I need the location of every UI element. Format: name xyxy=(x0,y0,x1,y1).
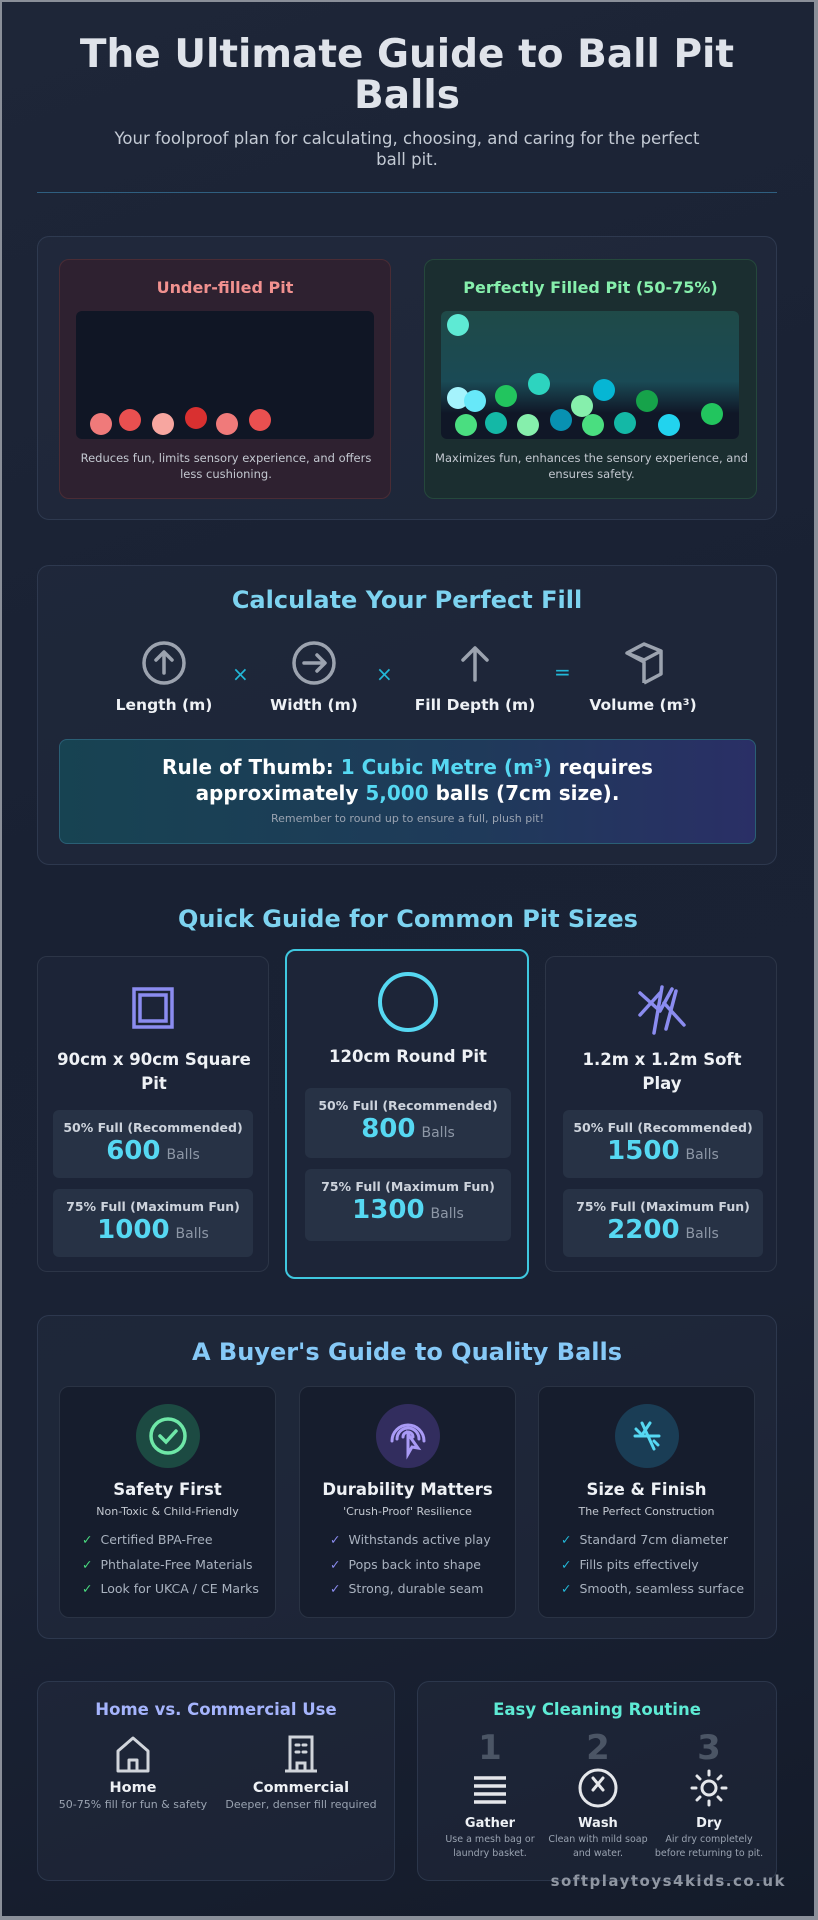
item: commercial xyxy=(225,1736,377,1811)
title: Safety First xyxy=(113,1480,222,1499)
step 2: wash: Wash xyxy=(578,1816,618,1831)
icon: check xyxy=(136,1404,200,1468)
card: size & finish xyxy=(538,1386,755,1618)
subtitle: Your foolproof plan for calculating, choosing, and caring for the perfect ball pit. xyxy=(115,129,699,169)
card title: 1.2m x 1.2m Soft Play xyxy=(582,1050,742,1093)
stat: 50%: 50% Full (Recommended) xyxy=(63,1120,243,1135)
callout: rule of thumb: Rule of Thumb: 1 Cubic Metre (m³) requires xyxy=(162,755,653,779)
checklist: ✓ Smooth, seamless surface xyxy=(561,1581,744,1596)
text: perfect description: Maximizes fun, enhances the sensory experience, and ensures safety. xyxy=(435,451,748,481)
panel: cleaning routine xyxy=(417,1681,777,1881)
formula labels: Fill Depth (m) xyxy=(415,696,535,714)
watermark: softplaytoys4kids.co.uk xyxy=(551,1872,786,1890)
icon: lines xyxy=(474,1776,506,1804)
stat: 75%: 75% Full (Maximum Fun) xyxy=(321,1179,495,1194)
icon: square xyxy=(132,987,174,1029)
stat: 75% xyxy=(563,1189,763,1257)
panel: buyer's guide xyxy=(37,1315,777,1639)
icon: building xyxy=(285,1736,317,1772)
stat: 50%: 50% Full (Recommended) xyxy=(573,1120,753,1135)
checklist: ✓ Fills pits effectively xyxy=(561,1556,699,1572)
step 3: dry: 3 xyxy=(697,1728,721,1768)
heading: calculate: Calculate Your Perfect Fill xyxy=(232,586,582,614)
icon: x circle xyxy=(578,1768,618,1808)
step 3: dry xyxy=(655,1728,763,1859)
panel: fill comparison xyxy=(37,236,777,520)
stat: 50% xyxy=(53,1110,253,1178)
checklist: ✓ Strong, durable seam xyxy=(330,1581,483,1596)
icon: length xyxy=(142,641,186,685)
checklist xyxy=(561,1532,744,1596)
item: commercial: Deeper, denser fill required xyxy=(225,1798,377,1811)
step 2: wash: 2 xyxy=(586,1728,610,1768)
pit illustration: full balls xyxy=(441,311,739,439)
checklist: ✓ Phthalate-Free Materials xyxy=(82,1556,252,1572)
icon: width xyxy=(292,641,336,685)
operator: times: × xyxy=(232,662,249,686)
icon: volume cube xyxy=(625,642,663,684)
heading: under-filled: Under-filled Pit xyxy=(157,278,293,297)
subtitle: 'Crush-Proof' Resilience xyxy=(343,1505,472,1518)
item: commercial: Commercial xyxy=(253,1780,349,1796)
step 1: gather: 1 xyxy=(478,1728,502,1768)
checklist: ✓ Look for UKCA / CE Marks xyxy=(82,1581,259,1596)
icon: sun xyxy=(690,1770,728,1806)
card: perfectly filled pit xyxy=(424,259,757,499)
stat: 50%: 800 Balls xyxy=(361,1114,455,1144)
formula labels: Width (m) xyxy=(270,696,358,714)
pit illustration: sparse balls xyxy=(76,311,374,439)
checklist xyxy=(82,1532,259,1596)
formula labels: Length (m) xyxy=(116,696,212,714)
panel: calculate fill xyxy=(37,565,777,865)
step 1: gather: Use a mesh bag or laundry basket. xyxy=(445,1834,535,1859)
checklist: ✓ Standard 7cm diameter xyxy=(561,1532,728,1547)
text: under-filled description: Reduces fun, limits sensory experience, and offers less cushioning. xyxy=(81,451,371,481)
card: soft play xyxy=(545,956,777,1272)
heading: Easy Cleaning Routine xyxy=(493,1700,701,1719)
heading: quick guide: Quick Guide for Common Pit Sizes xyxy=(178,905,638,933)
stat: 50%: 600 Balls xyxy=(106,1136,200,1166)
icon: depth arrow xyxy=(461,646,489,682)
heading: buyer's guide: A Buyer's Guide to Quality Balls xyxy=(192,1338,622,1366)
stat: 75% xyxy=(305,1169,511,1241)
stat: 50%: 50% Full (Recommended) xyxy=(318,1098,498,1113)
panel: home vs commercial xyxy=(37,1681,395,1881)
checklist: ✓ Pops back into shape xyxy=(330,1556,481,1572)
icon: soft play xyxy=(638,985,686,1035)
checklist: ✓ Withstands active play xyxy=(330,1532,491,1547)
callout: rule of thumb: approximately 5,000 balls (7cm size). xyxy=(196,781,619,805)
icon: touch xyxy=(376,1404,440,1468)
operator: equals: = xyxy=(554,660,571,684)
callout: rule of thumb xyxy=(59,739,756,844)
stat: 75%: 75% Full (Maximum Fun) xyxy=(66,1199,240,1214)
subtitle: The Perfect Construction xyxy=(578,1505,715,1518)
step 2: wash xyxy=(548,1728,648,1859)
stat: 75%: 2200 Balls xyxy=(607,1215,719,1245)
icon: circle xyxy=(378,972,438,1032)
title: Size & Finish xyxy=(586,1480,707,1499)
card: under-filled pit xyxy=(59,259,391,499)
card: round pit (highlighted) xyxy=(285,949,529,1279)
formula labels xyxy=(116,696,697,714)
step 1: gather: Gather xyxy=(465,1816,515,1831)
step 3: dry: Dry xyxy=(696,1816,722,1831)
step 1: gather xyxy=(445,1728,535,1859)
item: home: 50-75% fill for fun & safety xyxy=(59,1798,207,1811)
item: home xyxy=(59,1736,207,1811)
card: square pit xyxy=(37,956,269,1272)
step 3: dry: Air dry completely before returning to pit. xyxy=(655,1834,763,1859)
card title: 120cm Round Pit xyxy=(329,1047,487,1066)
title: The Ultimate Guide to Ball Pit Balls xyxy=(80,32,734,118)
heading: perfectly filled: Perfectly Filled Pit (50-75%) xyxy=(463,278,718,297)
subtitle: Non-Toxic & Child-Friendly xyxy=(96,1505,239,1518)
stat: 50% xyxy=(305,1088,511,1158)
stat: 75%: 75% Full (Maximum Fun) xyxy=(576,1199,750,1214)
stat: 75% xyxy=(53,1189,253,1257)
stat: 50%: 1500 Balls xyxy=(607,1136,719,1166)
icon: house xyxy=(116,1736,150,1772)
step 2: wash: Clean with mild soap and water. xyxy=(548,1834,648,1859)
card: durability xyxy=(299,1386,516,1618)
operator: times: × xyxy=(376,662,393,686)
heading: Home vs. Commercial Use xyxy=(95,1700,337,1719)
card title: 90cm x 90cm Square Pit xyxy=(57,1050,251,1093)
callout: rule of thumb: Remember to round up to ensure a full, plush pit! xyxy=(271,812,544,825)
formula labels: Volume (m³) xyxy=(589,696,697,714)
icon: ruler xyxy=(615,1404,679,1468)
title: Durability Matters xyxy=(322,1480,493,1499)
checklist: ✓ Certified BPA-Free xyxy=(82,1532,213,1547)
formula icons xyxy=(142,641,663,686)
stat: 75%: 1300 Balls xyxy=(352,1195,464,1225)
stat: 75%: 1000 Balls xyxy=(97,1215,209,1245)
checklist xyxy=(330,1532,491,1596)
item: home: Home xyxy=(109,1780,157,1796)
stat: 50% xyxy=(563,1110,763,1178)
card: safety xyxy=(59,1386,276,1618)
